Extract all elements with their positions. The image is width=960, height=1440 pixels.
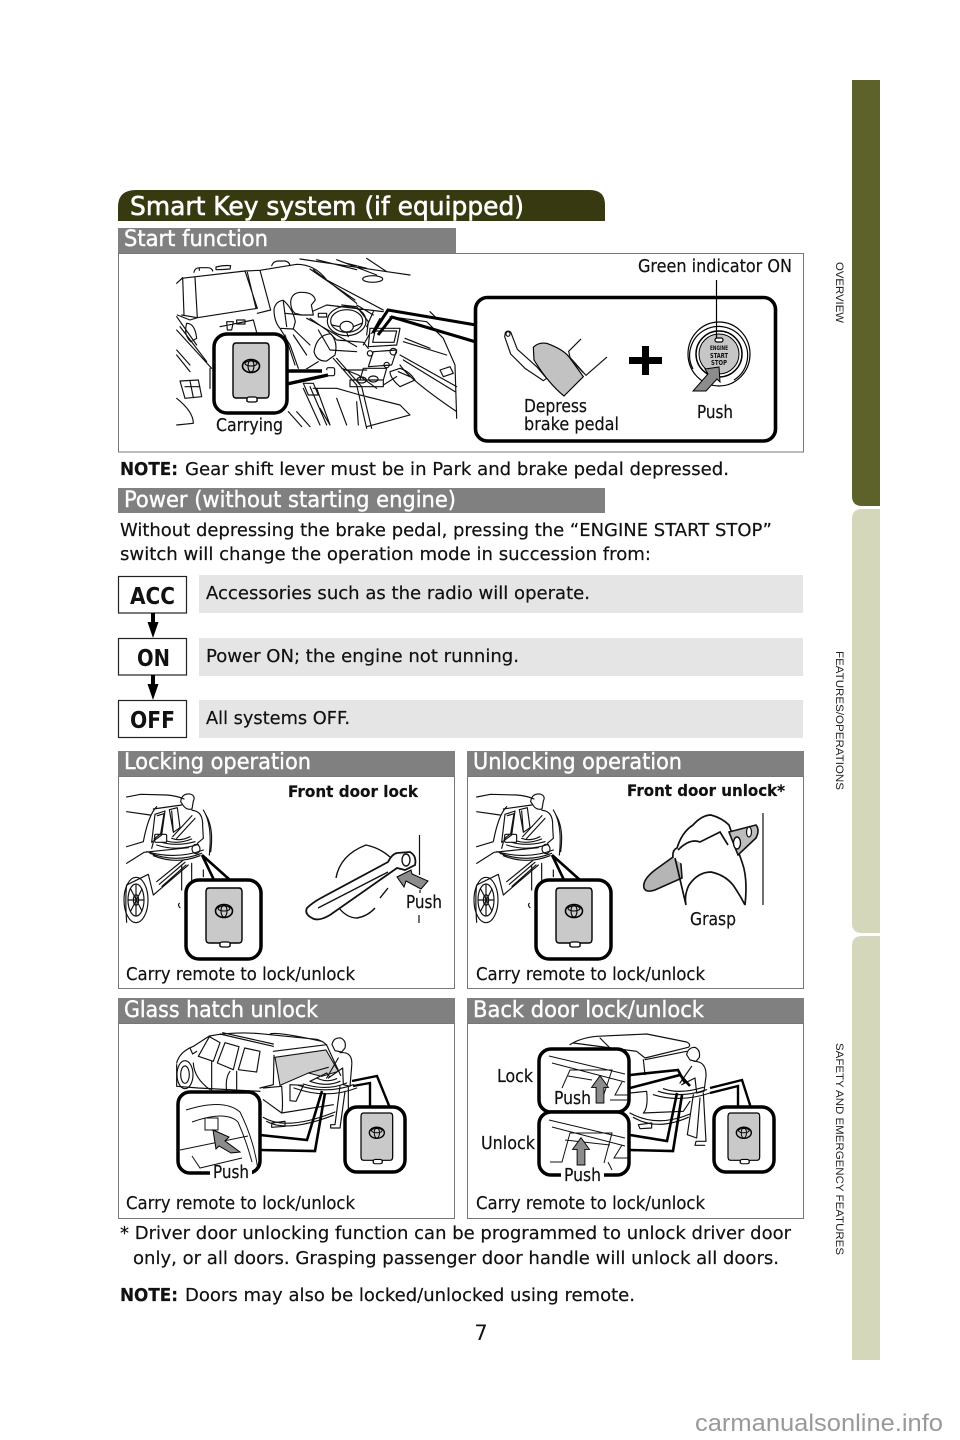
callout: glass hatch switch: [178, 1091, 325, 1183]
label: green indicator on: Green indicator ON: [638, 256, 792, 277]
mode: ACC: ACC: [130, 584, 175, 610]
label: push: Push: [697, 402, 733, 423]
label: depress brake pedal: Depress: [524, 396, 587, 417]
panel: glass hatch unlock: [118, 998, 455, 1218]
mode: ON: Power ON; the engine not running.: [206, 646, 519, 667]
title banner: Smart Key system (if equipped): [130, 192, 524, 222]
panel: unlocking operation: [467, 750, 804, 988]
note: gear shift: NOTE:: [120, 459, 178, 480]
mode: ACC: [118, 575, 803, 613]
footnote: driver door unlocking: only, or all doors. Grasping passenger door handle will unlock all doors.: [133, 1248, 779, 1269]
caption: Carry remote to lock/unlock: [126, 964, 356, 985]
footnote: driver door unlocking: [120, 1223, 792, 1269]
label: front door unlock: Front door unlock*: [627, 781, 786, 800]
footnote: driver door unlocking: * Driver door unlocking function can be programmed to unlock driver door: [120, 1223, 792, 1244]
note: gear shift: Gear shift lever must be in Park and brake pedal depressed.: [185, 459, 729, 480]
icon: engine start button: START: [710, 352, 728, 360]
label: unlock: Unlock: [481, 1133, 536, 1154]
mode: ACC: Accessories such as the radio will operate.: [206, 583, 590, 604]
callout: remote key: [536, 855, 611, 959]
watermark: carmanualsonline.info: [695, 1410, 943, 1437]
panel: unlocking operation: Unlocking operation: [473, 750, 682, 775]
panel: start function: [118, 254, 804, 452]
mode: OFF: All systems OFF.: [206, 708, 350, 729]
sidebar tab: overview: OVERVIEW: [833, 262, 845, 324]
text: power mode intro: Without depressing the brake pedal, pressing the “ENGINE START STOP”: [120, 520, 772, 541]
icon: brake pedal: [505, 331, 607, 396]
section header: power: Power (without starting engine): [124, 488, 456, 513]
label: depress brake pedal: brake pedal: [524, 414, 619, 435]
sidebar tab: features and operations: FEATURES/OPERATIONS: [833, 651, 845, 790]
illustration: SUV rear with person: [570, 1034, 710, 1145]
label: grasp: Grasp: [690, 909, 736, 930]
callout pointers to tailgate switches: [630, 1070, 690, 1151]
icon: plus sign: [629, 346, 662, 375]
panel: back door lock/unlock: Back door lock/unlock: [473, 998, 704, 1023]
inset: brake pedal and start button: [476, 280, 776, 441]
callout: glass hatch switch: Push: [213, 1162, 249, 1183]
panel: back door lock/unlock: [467, 998, 804, 1218]
illustration: car interior with driver: [177, 258, 457, 428]
illustration: door handle with push arrow: [306, 835, 428, 923]
note: remote: NOTE:: [120, 1285, 178, 1306]
callout pointer to inset: [373, 310, 476, 342]
icon: engine start button: ENGINE: [710, 345, 728, 352]
callout: remote key: [345, 1076, 405, 1172]
note: remote: Doors may also be locked/unlocked using remote.: [185, 1285, 635, 1306]
label: carrying: Carrying: [216, 415, 283, 436]
illustration: hand grasping handle: [644, 813, 763, 905]
callout: remote key: [710, 1080, 774, 1172]
arrow: ACC to ON: [148, 613, 158, 638]
panel: glass hatch unlock: Glass hatch unlock: [124, 998, 318, 1023]
label: front door lock: Front door lock: [288, 782, 418, 801]
illustration: person at driver door: [474, 794, 562, 923]
mode: ON: [118, 638, 803, 676]
panel: locking operation: Locking operation: [124, 750, 311, 775]
icon: engine start button: [688, 280, 750, 391]
sidebar tab: safety and emergency features: SAFETY AND EMERGENCY FEATURES: [833, 1043, 845, 1255]
label: depress brake pedal: [524, 396, 619, 435]
text: power mode intro: [120, 520, 772, 565]
caption: Carry remote to lock/unlock: [126, 1193, 356, 1214]
caption: Carry remote to lock/unlock: [476, 1193, 706, 1214]
sidebar tab: features and operations: [833, 509, 880, 933]
illustration: person at driver door: [124, 794, 212, 923]
callout: remote key: [186, 855, 261, 959]
callout: lock switch: [539, 1049, 629, 1112]
section header: start function: Start function: [124, 227, 268, 252]
label: lock: Lock: [497, 1066, 534, 1087]
label: push: Push: [406, 892, 442, 913]
arrow: ON to OFF: [148, 675, 158, 700]
panel: locking operation: [118, 750, 455, 988]
caption: Carry remote to lock/unlock: [476, 964, 706, 985]
mode: OFF: OFF: [130, 708, 175, 734]
callout: unlock switch: [539, 1112, 629, 1186]
page number: 7: [474, 1321, 488, 1345]
section header: start function: [118, 227, 456, 253]
mode: OFF: [118, 700, 803, 738]
mode: ON: ON: [137, 646, 170, 672]
icon: engine start button: STOP: [711, 359, 727, 367]
sidebar tab: safety and emergency features: [833, 936, 880, 1360]
text: power mode intro: switch will change the operation mode in succession from:: [120, 544, 651, 565]
callout: unlock switch: Push: [564, 1165, 601, 1186]
illustration: SUV rear with person: [177, 1033, 357, 1131]
callout: lock switch: Push: [554, 1088, 591, 1109]
callout: carrying key: [214, 334, 331, 413]
sidebar tab: overview: [833, 80, 880, 506]
